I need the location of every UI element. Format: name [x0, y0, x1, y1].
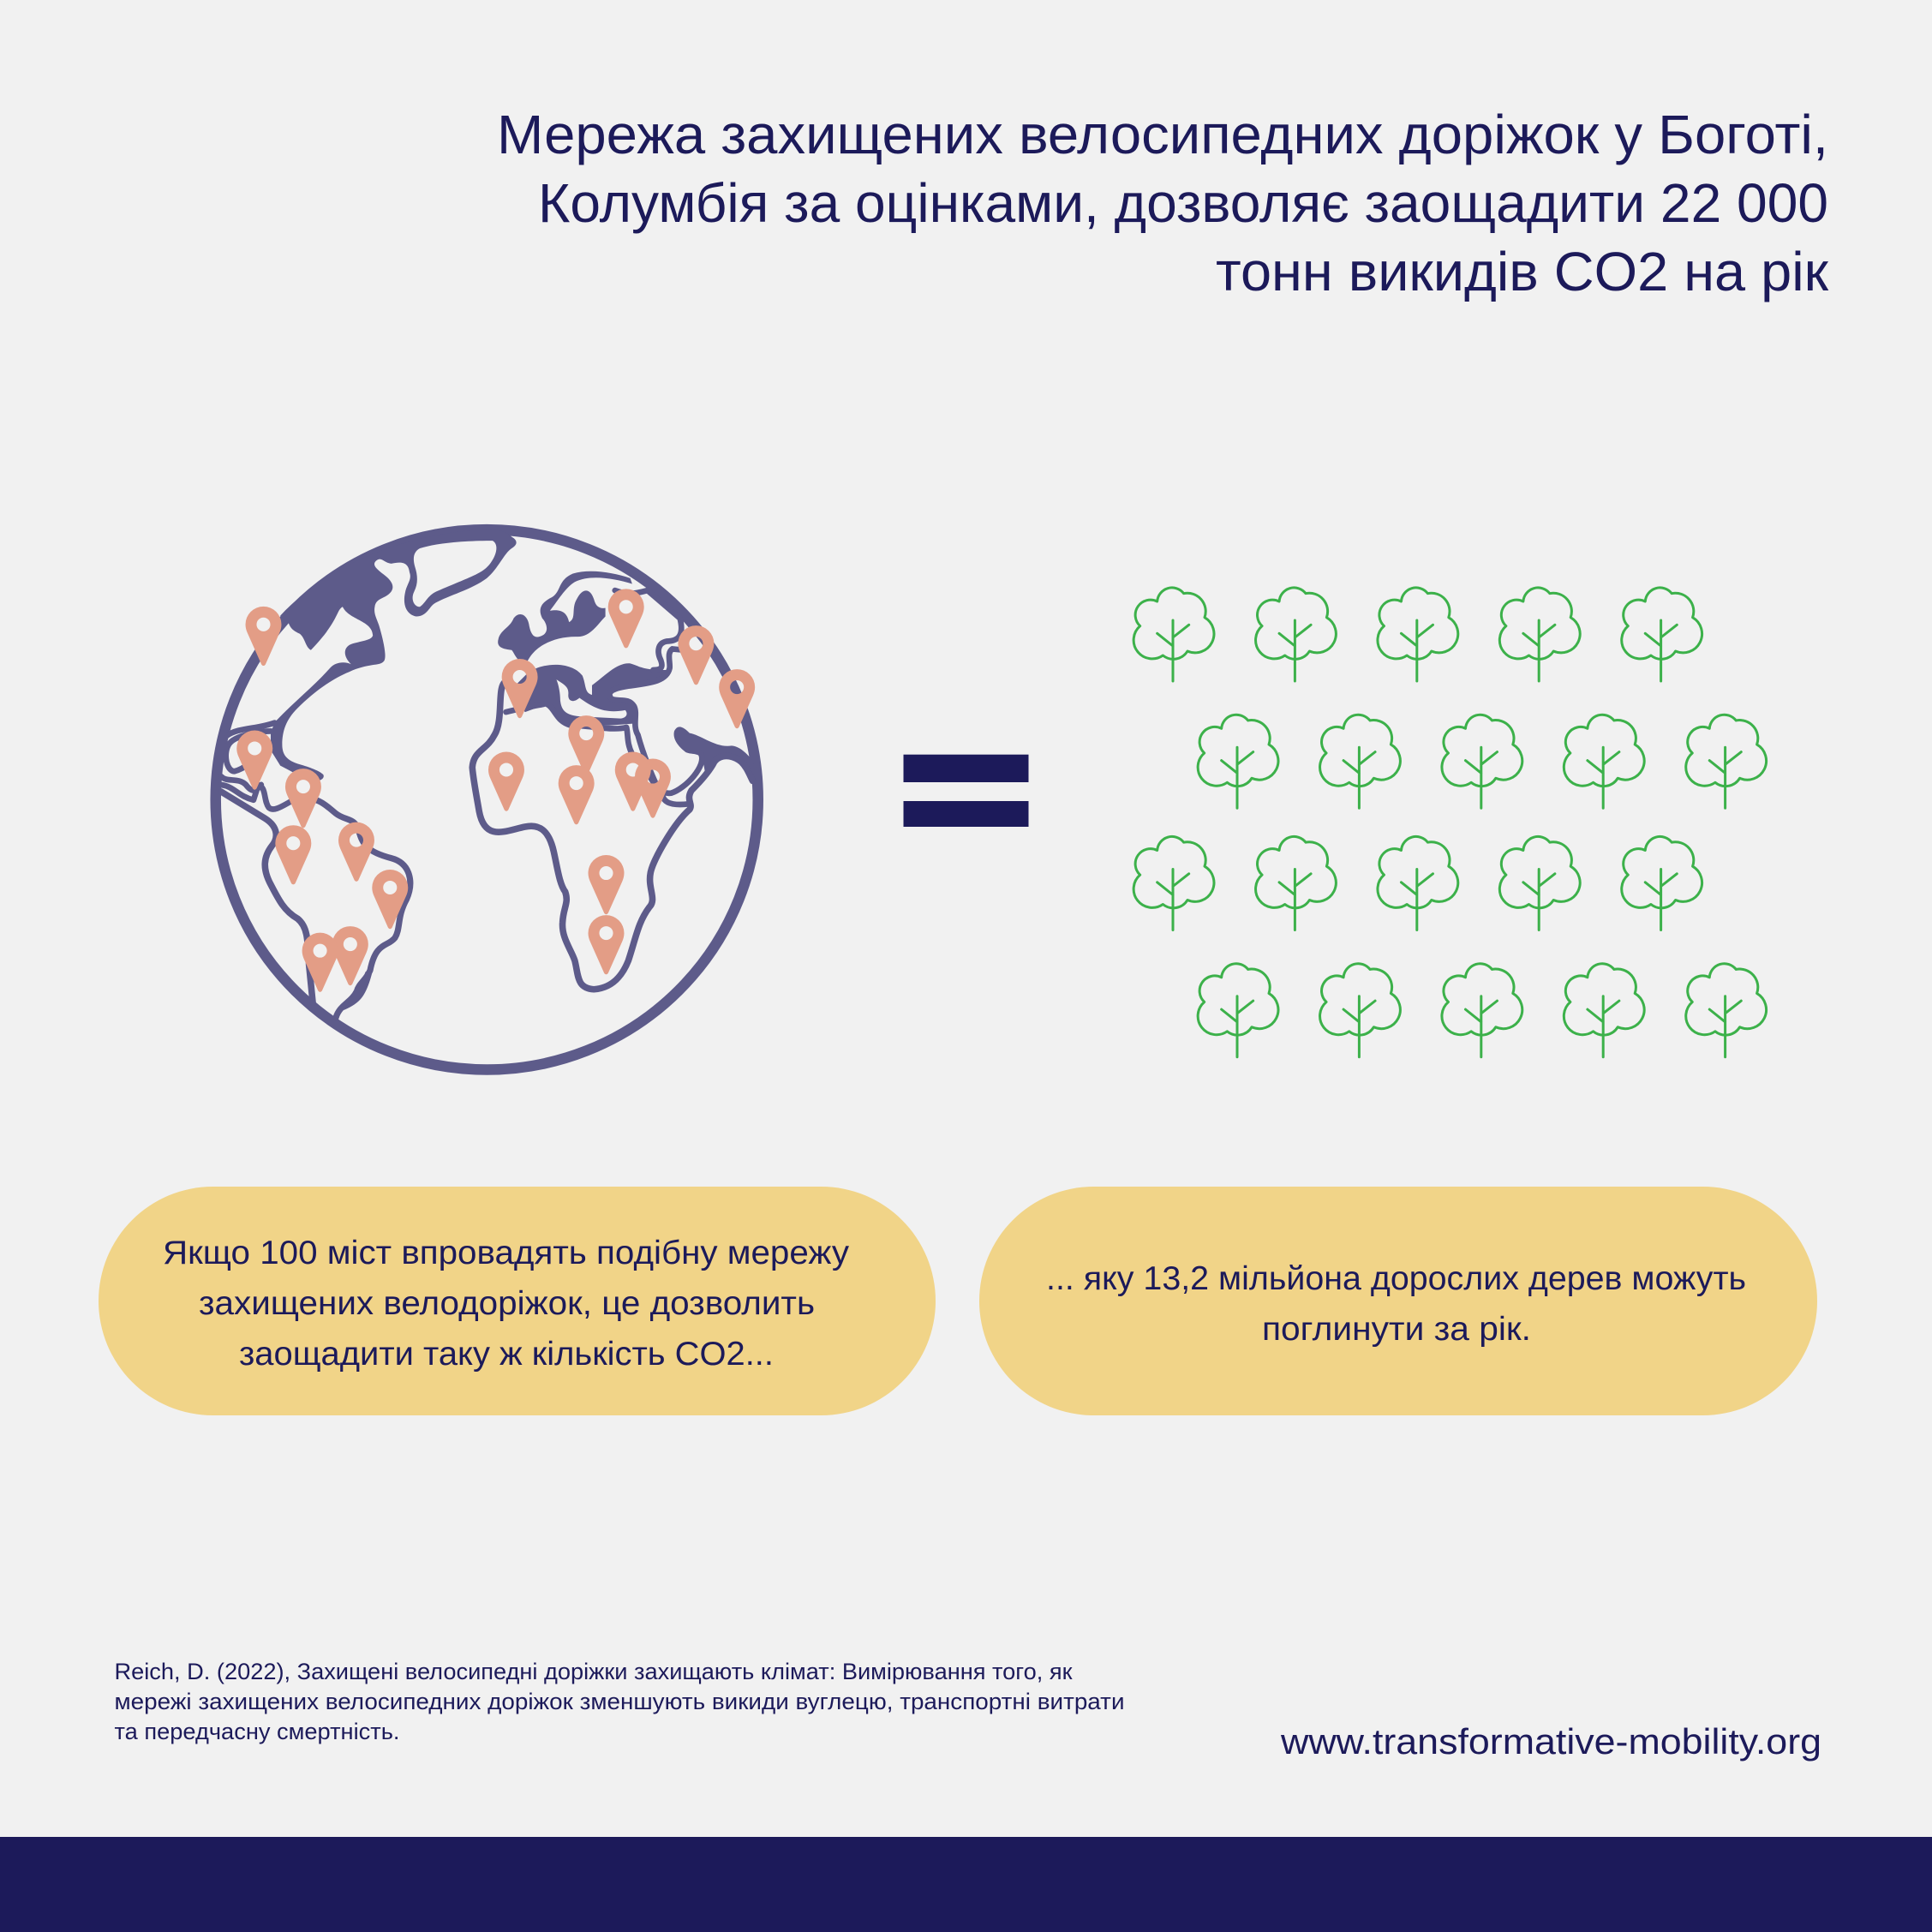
- panel: left callout: захищених велодоріжок, це дозволить: [199, 1285, 815, 1322]
- source citation: Reich, D. (2022), Захищені велосипедні доріжки захищають клімат: Вимірювання того, як: [115, 1659, 1073, 1684]
- panel: left callout: заощадити таку ж кількість CO2...: [239, 1336, 774, 1373]
- title: Колумбія за оцінками, дозволяє заощадити 22 000: [538, 172, 1828, 234]
- title: Мережа захищених велосипедних доріжок у Боготі,: [497, 104, 1828, 165]
- globe ring: [216, 529, 758, 1069]
- source citation: [115, 1659, 1124, 1744]
- panel: right callout: поглинути за рік.: [1262, 1311, 1531, 1348]
- tree row 4: [1198, 964, 1767, 1057]
- website url: www.transformative-mobility.org: [1280, 1721, 1821, 1762]
- location pins: [236, 589, 755, 992]
- source citation: та передчасну смертність.: [115, 1719, 399, 1744]
- panel: right callout: [979, 1187, 1817, 1415]
- source citation: мережі захищених велосипедних доріжок зменшують викиди вуглецю, транспортні витрати: [115, 1689, 1124, 1714]
- panel: left callout: Якщо 100 міст впровадять подібну мережу: [163, 1235, 850, 1271]
- tree row 1: [1133, 588, 1702, 681]
- title: тонн викидів CO2 на рік: [1216, 241, 1829, 302]
- footer bar: [0, 1837, 1932, 1932]
- equals sign: [903, 755, 1028, 827]
- continents: [271, 529, 754, 781]
- tree grid: [1133, 588, 1767, 1057]
- globe with location pins: [216, 529, 758, 1069]
- panel: right callout: ... яку 13,2 мільйона дорослих дерев можуть: [1046, 1260, 1746, 1297]
- panel: left callout: [99, 1187, 936, 1415]
- title: [497, 104, 1829, 302]
- tree row 3: [1133, 836, 1702, 930]
- tree row 2: [1198, 715, 1767, 808]
